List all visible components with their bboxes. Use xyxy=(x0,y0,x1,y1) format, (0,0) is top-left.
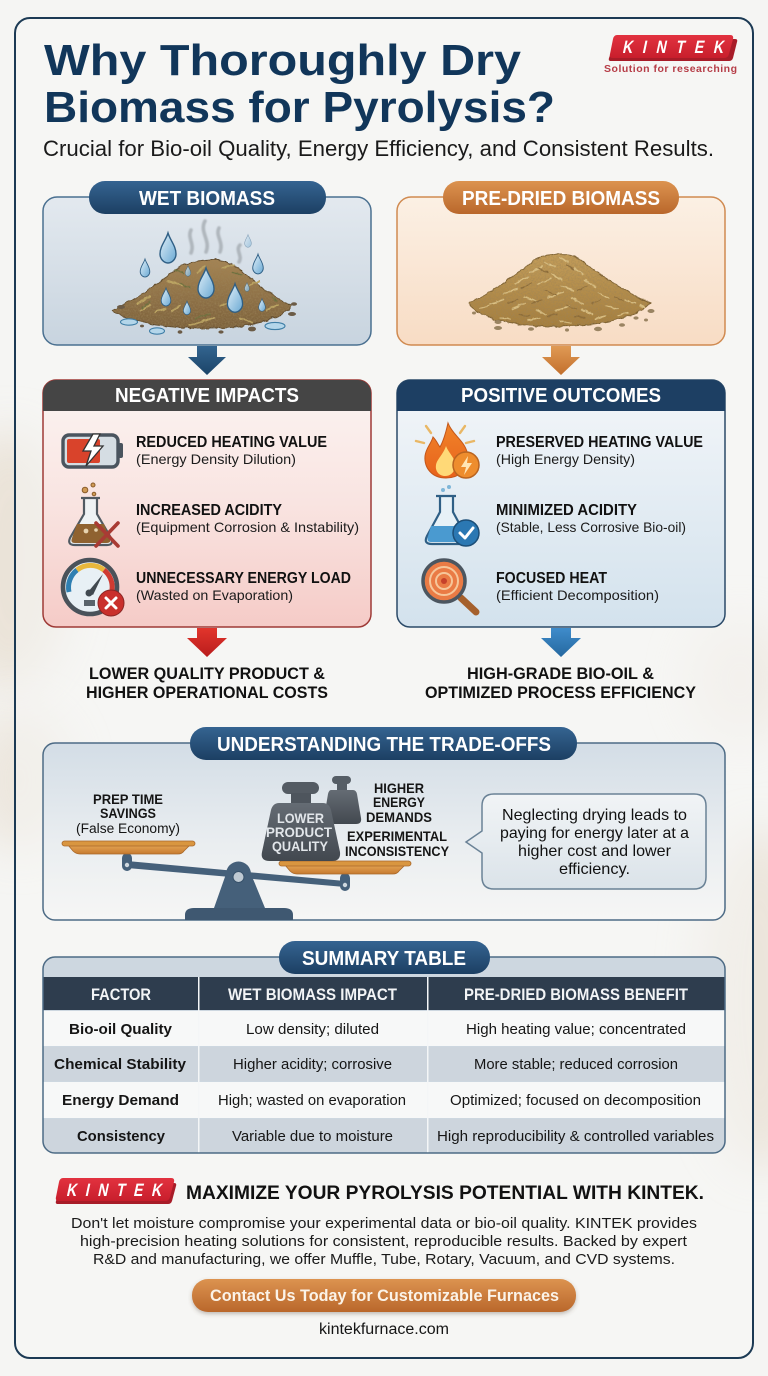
text: higher energy demands: DEMANDS xyxy=(366,809,432,825)
text: call to action paragraph: high-precision heating solutions for consistent, reproducible results. Backed by expert xyxy=(80,1233,688,1250)
table row: consistency: Variable due to moisture xyxy=(232,1128,393,1145)
heading: pre-dried biomass pill: PRE-DRIED BIOMASS xyxy=(462,188,660,210)
table row: consistency: Consistency xyxy=(77,1128,166,1145)
text: experimental inconsistency xyxy=(345,828,450,859)
heading: wet biomass pill: WET BIOMASS xyxy=(139,188,275,210)
heading: summary table pill xyxy=(279,941,490,974)
text: increased acidity xyxy=(136,502,359,535)
icon: dry pile xyxy=(468,254,654,332)
icon: large weight: LOWER xyxy=(277,810,324,826)
table row: consistency: High reproducibility & controlled variables xyxy=(437,1128,714,1145)
icon: wet pile with water drops xyxy=(113,233,297,334)
arrow: negative result xyxy=(187,628,227,657)
title: Why Thoroughly Dry xyxy=(44,36,522,85)
panel: summary table xyxy=(43,941,725,1153)
arrow: positive result xyxy=(541,628,581,657)
panel: negative impacts xyxy=(43,380,371,627)
table row: energy demand xyxy=(43,1082,725,1118)
panel: pre-dried biomass xyxy=(397,181,725,345)
text: reduced heating value: REDUCED HEATING VALUE xyxy=(136,434,327,451)
text: increased acidity: INCREASED ACIDITY xyxy=(136,502,282,519)
table header row: WET BIOMASS IMPACT xyxy=(228,986,397,1004)
panel: positive outcomes xyxy=(397,380,725,627)
subtitle: Crucial for Bio-oil Quality, Energy Efficiency, and Consistent Results. xyxy=(43,136,714,161)
heading: positive outcomes xyxy=(397,380,725,411)
text: experimental inconsistency: EXPERIMENTAL xyxy=(347,828,447,844)
callout: neglecting drying: Neglecting drying leads to xyxy=(502,807,687,824)
heading: wet biomass pill xyxy=(89,181,326,214)
table header row xyxy=(43,977,725,1010)
icon: small weight xyxy=(324,776,361,824)
button: contact us: Contact Us Today for Customizable Furnaces xyxy=(210,1286,559,1305)
text: focused heat: (Efficient Decomposition) xyxy=(496,587,659,603)
button: contact us xyxy=(192,1279,576,1312)
logo: KINTEK footer: KINTEK xyxy=(65,1181,173,1200)
text: experimental inconsistency: INCONSISTENCY xyxy=(345,843,450,859)
heading: summary table pill: SUMMARY TABLE xyxy=(302,948,466,970)
text: preserved heating value: (High Energy Density) xyxy=(496,451,635,467)
text: preserved heating value: PRESERVED HEATING VALUE xyxy=(496,434,703,451)
icon: steam wisps xyxy=(190,221,240,262)
text: focused heat xyxy=(496,570,659,603)
heading: call to action: MAXIMIZE YOUR PYROLYSIS POTENTIAL WITH KINTEK. xyxy=(186,1183,704,1204)
text: prep time savings: (False Economy) xyxy=(76,821,180,836)
text: positive result: HIGH-GRADE BIO-OIL & xyxy=(467,664,654,683)
title xyxy=(44,36,555,132)
text: higher energy demands: HIGHER xyxy=(374,780,424,796)
heading: pre-dried biomass pill xyxy=(443,181,679,214)
table row: bio-oil quality: High heating value; concentrated xyxy=(466,1021,686,1038)
icon: battery xyxy=(63,434,123,467)
table row: chemical stability: Chemical Stability xyxy=(54,1056,187,1073)
text: negative result xyxy=(86,664,328,702)
table row: bio-oil quality: Low density; diluted xyxy=(246,1021,379,1038)
icon: energy gauge xyxy=(63,560,124,616)
table row: bio-oil quality xyxy=(43,1011,725,1046)
table header row: FACTOR xyxy=(91,986,151,1004)
text: prep time savings xyxy=(76,792,180,836)
logo: KINTEK top right xyxy=(604,35,737,75)
text: unnecessary energy load xyxy=(136,570,351,603)
text: unnecessary energy load: (Wasted on Evaporation) xyxy=(136,587,293,603)
callout: neglecting drying: paying for energy later at a xyxy=(500,825,689,842)
chart: balance scale xyxy=(62,776,411,920)
text: prep time savings: PREP TIME xyxy=(93,792,163,807)
text: higher energy demands xyxy=(366,780,432,825)
panel: trade-offs xyxy=(43,727,725,920)
text: prep time savings: SAVINGS xyxy=(100,806,156,821)
icon: magnifier with target xyxy=(423,560,476,612)
text: minimized acidity: MINIMIZED ACIDITY xyxy=(496,502,637,519)
callout: neglecting drying: higher cost and lower xyxy=(518,843,672,860)
panel: wet biomass xyxy=(43,181,371,345)
table row: bio-oil quality: Bio-oil Quality xyxy=(69,1021,173,1038)
text: higher energy demands: ENERGY xyxy=(373,794,426,810)
text: minimized acidity: (Stable, Less Corrosive Bio-oil) xyxy=(496,519,686,535)
text: reduced heating value xyxy=(136,434,327,467)
table row: energy demand: Optimized; focused on decomposition xyxy=(450,1092,701,1109)
text: website: kintekfurnace.com xyxy=(319,1321,449,1338)
table row: energy demand: High; wasted on evaporation xyxy=(218,1092,406,1109)
table header row: PRE-DRIED BIOMASS BENEFIT xyxy=(464,986,688,1004)
text: call to action paragraph: Don't let moisture compromise your experimental data or bio-oil quality. KINTEK provides xyxy=(71,1215,697,1232)
text: positive result xyxy=(425,664,697,702)
table row: consistency xyxy=(43,1119,725,1153)
icon: large weight: QUALITY xyxy=(272,838,329,854)
text: positive result: OPTIMIZED PROCESS EFFICIENCY xyxy=(425,683,697,702)
icon: large weight xyxy=(262,782,340,861)
heading: trade-offs pill xyxy=(190,727,577,760)
icon: flask with check badge xyxy=(426,485,479,546)
text: negative result: LOWER QUALITY PRODUCT & xyxy=(89,664,325,683)
icon: corroded flask xyxy=(69,483,118,546)
text: call to action paragraph: R&D and manufacturing, we offer Muffle, Tube, Rotary, Vacuum, and CVD systems. xyxy=(93,1251,675,1268)
logo: KINTEK footer xyxy=(56,1178,176,1204)
table row: chemical stability: More stable; reduced corrosion xyxy=(474,1056,678,1073)
icon: flame with energy badge xyxy=(416,423,479,478)
icon: right pan xyxy=(279,861,411,874)
heading: negative impacts xyxy=(43,380,371,411)
logo: KINTEK top right: Solution for researching xyxy=(604,63,737,75)
text: reduced heating value: (Energy Density Dilution) xyxy=(136,451,296,467)
callout: neglecting drying: efficiency. xyxy=(559,861,630,878)
arrow: dried to positive xyxy=(542,346,580,375)
logo: KINTEK top right: KINTEK xyxy=(621,38,736,57)
heading: negative impacts: NEGATIVE IMPACTS xyxy=(115,385,299,407)
arrow: wet to negative xyxy=(188,346,226,375)
text: unnecessary energy load: UNNECESSARY ENERGY LOAD xyxy=(136,570,351,587)
table row: chemical stability: Higher acidity; corrosive xyxy=(233,1056,392,1073)
icon: left pan xyxy=(62,841,195,854)
callout: neglecting drying xyxy=(466,794,706,889)
table row: energy demand: Energy Demand xyxy=(62,1092,179,1109)
heading: positive outcomes: POSITIVE OUTCOMES xyxy=(461,385,661,407)
heading: trade-offs pill: UNDERSTANDING THE TRADE-OFFS xyxy=(217,734,551,756)
text: increased acidity: (Equipment Corrosion & Instability) xyxy=(136,519,359,535)
text: negative result: HIGHER OPERATIONAL COSTS xyxy=(86,683,328,702)
title: Biomass for Pyrolysis? xyxy=(44,83,555,132)
text: minimized acidity xyxy=(496,502,686,535)
table row: chemical stability xyxy=(43,1047,725,1081)
icon: large weight: PRODUCT xyxy=(266,824,332,840)
text: call to action paragraph xyxy=(71,1215,697,1268)
text: preserved heating value xyxy=(496,434,703,467)
text: focused heat: FOCUSED HEAT xyxy=(496,570,607,587)
